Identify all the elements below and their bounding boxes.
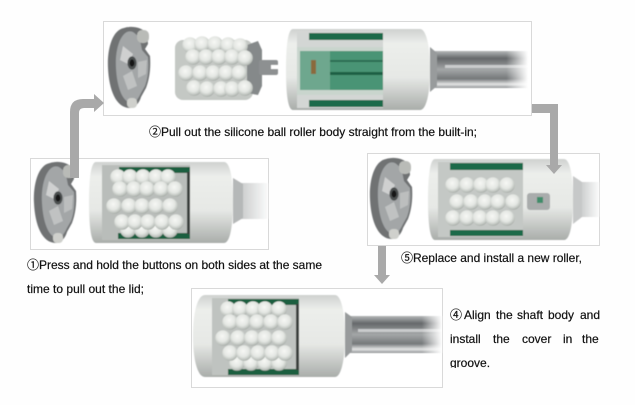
icon: lid removed [108,27,150,108]
roller body [175,36,279,100]
cylinder housing with shaft [286,29,528,110]
text: step 4 caption: Align [464,308,491,322]
cylinder with cover fitted [193,295,442,377]
text: step 4 caption: install [450,332,481,346]
text: step 4 caption: in [563,332,572,346]
text: step 4 caption: and [580,308,600,322]
text: step 4 caption: cover [522,332,551,346]
text: step 2 caption: ②Pull out the silicone ball roller body straight from the built-in; [149,125,477,139]
arrow: step 2 to step 3 [532,104,562,174]
text: step 4 caption: ④ [450,308,462,322]
text: step 1 caption [27,258,322,296]
text: step 4 caption: groove. [450,356,490,370]
text: step 4 caption: the [582,332,599,346]
text: step 3 caption: ⑤Replace and install a new roller, [401,251,582,265]
text: step 1 caption: ①Press and hold the buttons on both sides at the same [27,258,322,272]
arrow: step 3 to step 4 [374,246,390,284]
panel: step 4 install cover [192,288,442,388]
cylinder with new roller [428,159,599,240]
arrow: step 1 to step 2 [70,94,104,178]
text: step 4 caption: shaft [517,308,544,322]
text: step 4 caption: the [493,332,510,346]
panel: step 2 pull out roller [104,22,532,116]
panel: step 3 new roller [368,154,600,246]
text: step 4 caption: the [496,308,513,322]
text: step 1 caption: time to pull out the lid; [27,282,144,296]
icon: lid [370,158,412,239]
panel: step 1 remove lid [30,158,268,250]
text: step 4 caption: body [548,308,574,322]
cylinder with roller [89,162,268,243]
icon: lid [34,162,76,243]
text: step 4 caption [449,308,600,374]
